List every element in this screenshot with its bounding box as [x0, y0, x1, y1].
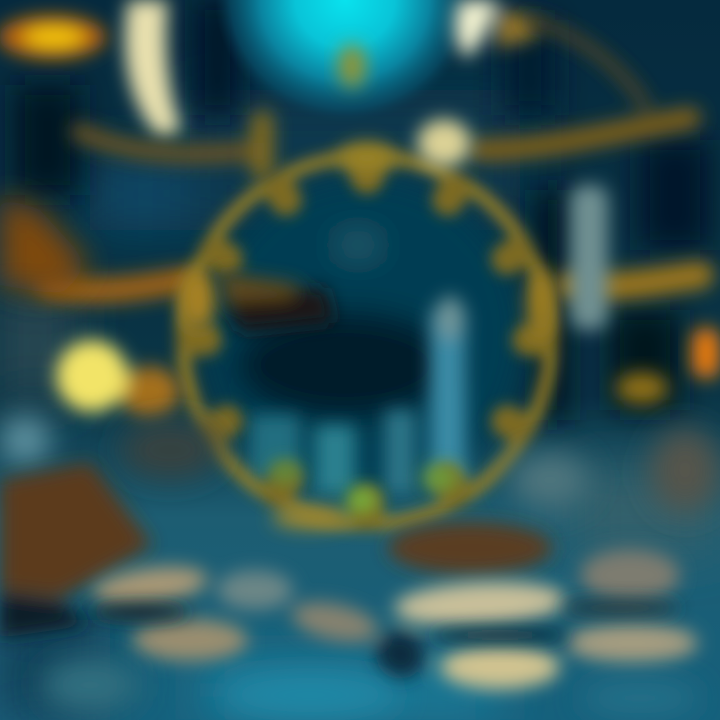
small amber lamp right: [616, 372, 668, 404]
teal chart bars inside the gear: [250, 296, 466, 495]
pale vertical column right: [570, 185, 608, 330]
bright bulb on gear top: [417, 119, 471, 167]
gear inner dark core: [205, 175, 525, 495]
bright teal floor: [40, 657, 700, 717]
gear ring highlights: [180, 142, 553, 529]
coins pile: [90, 549, 698, 689]
brown stack at gear base: [388, 522, 552, 574]
dark gaps between coins: [90, 601, 680, 642]
cyan glow at top: [215, 0, 475, 125]
horizontal gold pipes: [50, 20, 700, 290]
glowing yellow orb: [56, 340, 180, 418]
dark brown ledge inside gear: [220, 272, 335, 332]
dark vertical columns: [15, 0, 710, 420]
brown book bottom left: [0, 462, 152, 638]
gear ring with teeth: [183, 156, 551, 524]
right orange light: [692, 328, 720, 378]
left orange block: [0, 195, 90, 295]
cream light streaks: [125, 0, 537, 138]
small gold emblem at top: [338, 44, 366, 88]
top-left amber lamp: [0, 15, 106, 59]
pale blue patch left: [0, 416, 720, 512]
